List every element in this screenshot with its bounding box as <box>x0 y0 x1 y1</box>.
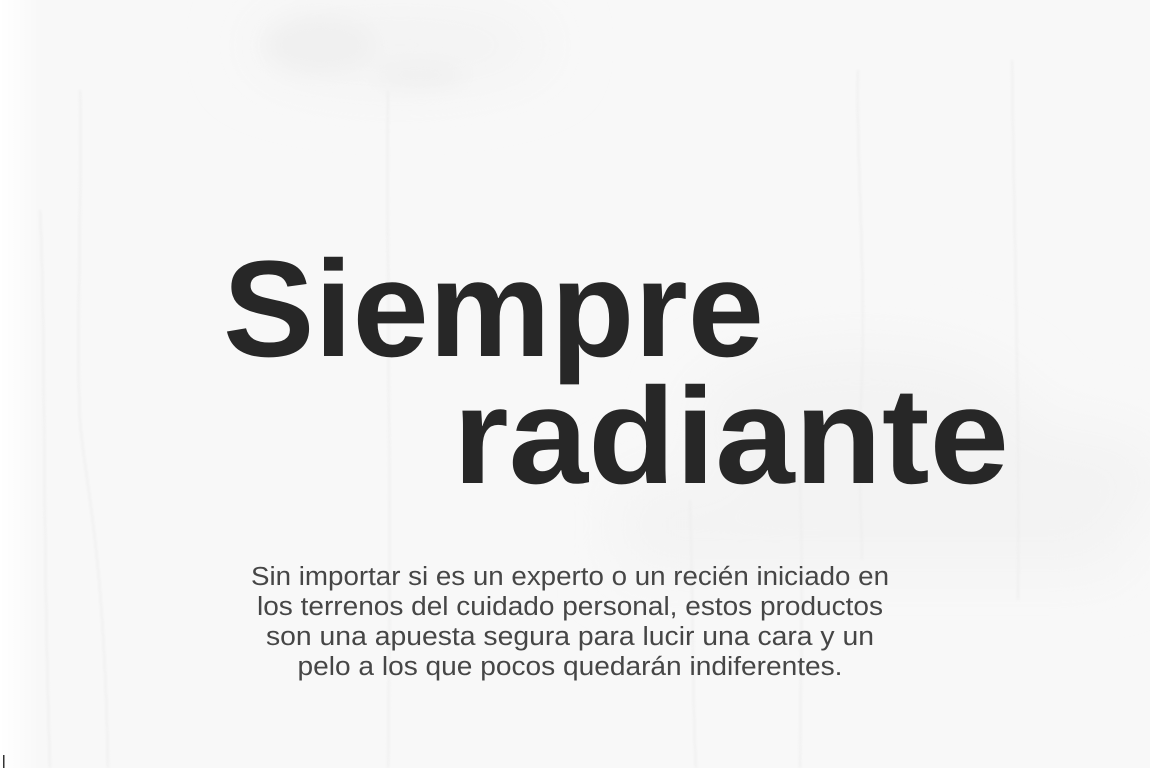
description text block: los terrenos del cuidado personal, estos productos <box>257 593 883 621</box>
title line 2: radiante <box>453 360 1009 513</box>
description text block <box>251 563 889 681</box>
title <box>223 233 1009 513</box>
title line 1: Siempre <box>223 233 764 386</box>
description text block: Sin importar si es un experto o un recién iniciado en <box>251 563 889 591</box>
corner tick mark <box>3 755 4 768</box>
description text block: pelo a los que pocos quedarán indiferentes. <box>298 653 842 681</box>
description text block: son una apuesta segura para lucir una cara y un <box>266 623 874 651</box>
